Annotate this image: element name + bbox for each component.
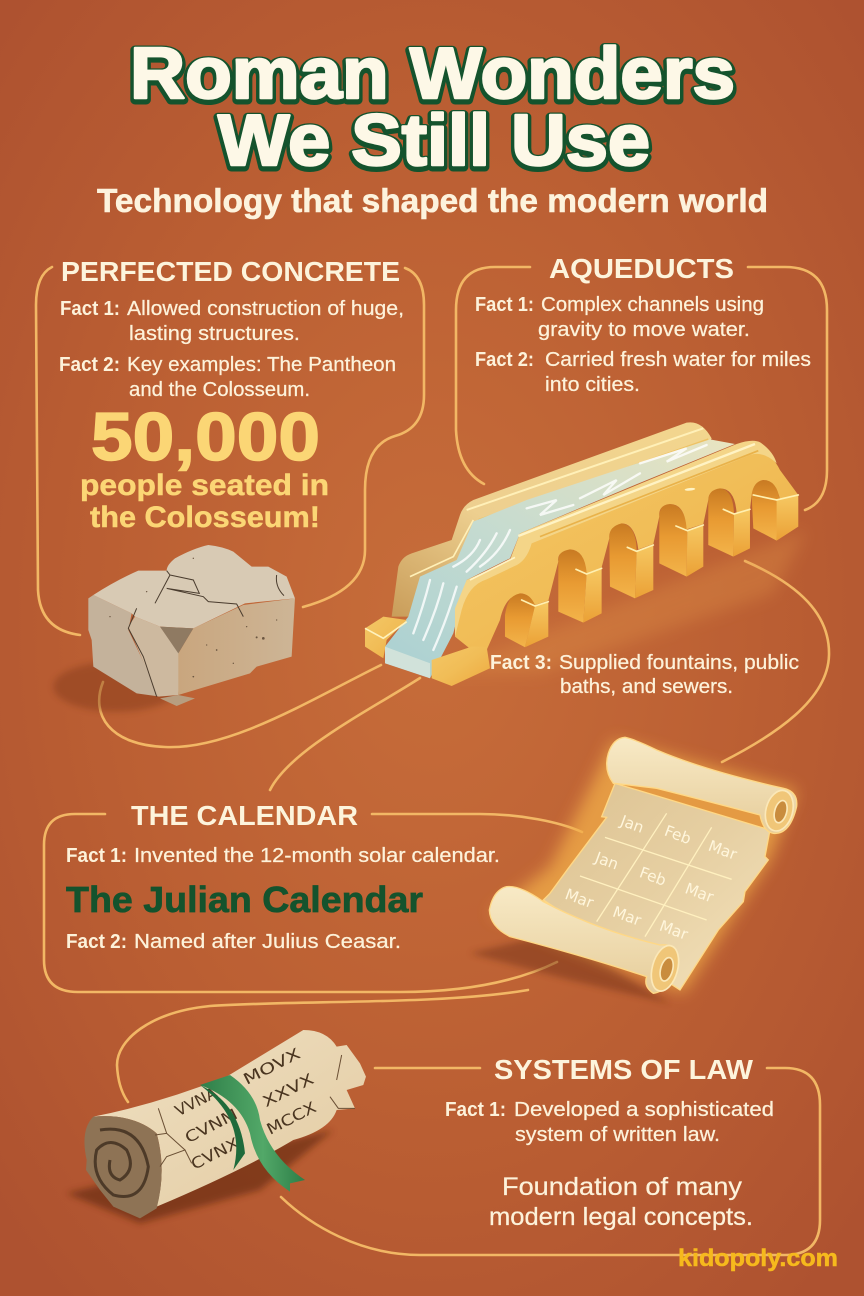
- fact 3: Fact 3:: [490, 652, 552, 674]
- fact 2: and the Colosseum.: [129, 379, 310, 401]
- fact 1: Fact 1:: [60, 298, 120, 320]
- fact 2: Named after Julius Ceasar.: [134, 931, 401, 953]
- icon: calendar scroll: [470, 737, 798, 1003]
- big number callout: people seated in: [80, 469, 329, 502]
- panel: systems of law: [67, 1030, 774, 1231]
- fact 1: gravity to move water.: [538, 319, 750, 341]
- icon: law scroll: VVNA: [172, 1084, 221, 1120]
- big number callout: 50,000: [91, 399, 320, 475]
- big number callout: the Colosseum!: [90, 501, 320, 534]
- panel: aqueducts: [365, 253, 811, 698]
- big number callout: [80, 399, 329, 534]
- panel: perfected concrete: [53, 256, 404, 712]
- fact 3: Supplied fountains, public: [559, 652, 799, 674]
- subtitle: Technology that shaped the modern world: [97, 182, 768, 219]
- fact 1: Developed a sophisticated: [514, 1099, 774, 1121]
- icon: law scroll: MCCX: [264, 1098, 320, 1139]
- fact 1: system of written law.: [515, 1124, 720, 1146]
- legal concepts note: [489, 1173, 753, 1231]
- icon: law scroll: CVNM: [182, 1105, 241, 1147]
- fact 3: [490, 652, 799, 698]
- fact 1: Invented the 12-month solar calendar.: [134, 845, 500, 867]
- fact 2: Fact 2:: [59, 354, 120, 376]
- heading: systems of law: SYSTEMS OF LAW: [494, 1054, 754, 1085]
- fact 1: [445, 1099, 774, 1146]
- icon: calendar scroll: Mar: [683, 879, 717, 907]
- icon: calendar scroll: Mar: [657, 917, 691, 944]
- fact 1: lasting structures.: [129, 323, 300, 345]
- icon: calendar scroll: Feb: [637, 863, 669, 890]
- brand: kidopoly.com: kidopoly.com: [678, 1245, 838, 1272]
- fact 2: [475, 349, 811, 396]
- connector lines: [36, 267, 829, 1255]
- fact 1: Allowed construction of huge,: [127, 298, 404, 320]
- icon: concrete block: [53, 545, 295, 712]
- panel: the calendar: [66, 737, 798, 1003]
- legal concepts note: Foundation of many: [502, 1173, 743, 1201]
- fact 2: into cities.: [545, 374, 640, 396]
- highlight: the julian calendar: The Julian Calendar: [66, 879, 423, 920]
- legal concepts note: modern legal concepts.: [489, 1203, 753, 1231]
- fact 2: Fact 2:: [66, 931, 127, 953]
- icon: law scroll: [67, 1030, 366, 1223]
- heading: the calendar: THE CALENDAR: [131, 800, 358, 831]
- heading: aqueducts: AQUEDUCTS: [549, 253, 734, 284]
- fact 3: baths, and sewers.: [560, 676, 733, 698]
- icon: law scroll: CVNX: [188, 1134, 243, 1174]
- icon: calendar scroll: Jan: [617, 811, 646, 837]
- icon: calendar scroll: Mar: [563, 885, 597, 912]
- title: We Still Use: [218, 101, 650, 181]
- fact 1: Fact 1:: [475, 294, 534, 316]
- icon: law scroll: XXVX: [260, 1070, 317, 1111]
- title: [130, 34, 735, 183]
- icon: law scroll: MOVX: [240, 1044, 304, 1089]
- fact 1: Complex channels using: [541, 294, 764, 316]
- icon: calendar scroll: Mar: [610, 903, 644, 930]
- icon: calendar scroll: Mar: [706, 837, 740, 864]
- fact 1: Fact 1:: [66, 845, 127, 867]
- fact 2: Carried fresh water for miles: [545, 349, 811, 371]
- title: We Still Use: [218, 103, 650, 183]
- icon: calendar scroll: Feb: [662, 822, 694, 848]
- fact 2: Fact 2:: [475, 349, 534, 371]
- heading: perfected concrete: PERFECTED CONCRETE: [61, 256, 400, 287]
- fact 2: Key examples: The Pantheon: [127, 354, 396, 376]
- fact 1: Fact 1:: [445, 1099, 506, 1121]
- title: Roman Wonders: [130, 34, 735, 114]
- icon: golden aqueduct: [365, 422, 807, 686]
- icon: calendar scroll: Jan: [592, 848, 621, 873]
- fact 1: [475, 294, 764, 341]
- title: Roman Wonders: [130, 36, 735, 116]
- fact 1: [60, 298, 404, 345]
- fact 2: [59, 354, 396, 401]
